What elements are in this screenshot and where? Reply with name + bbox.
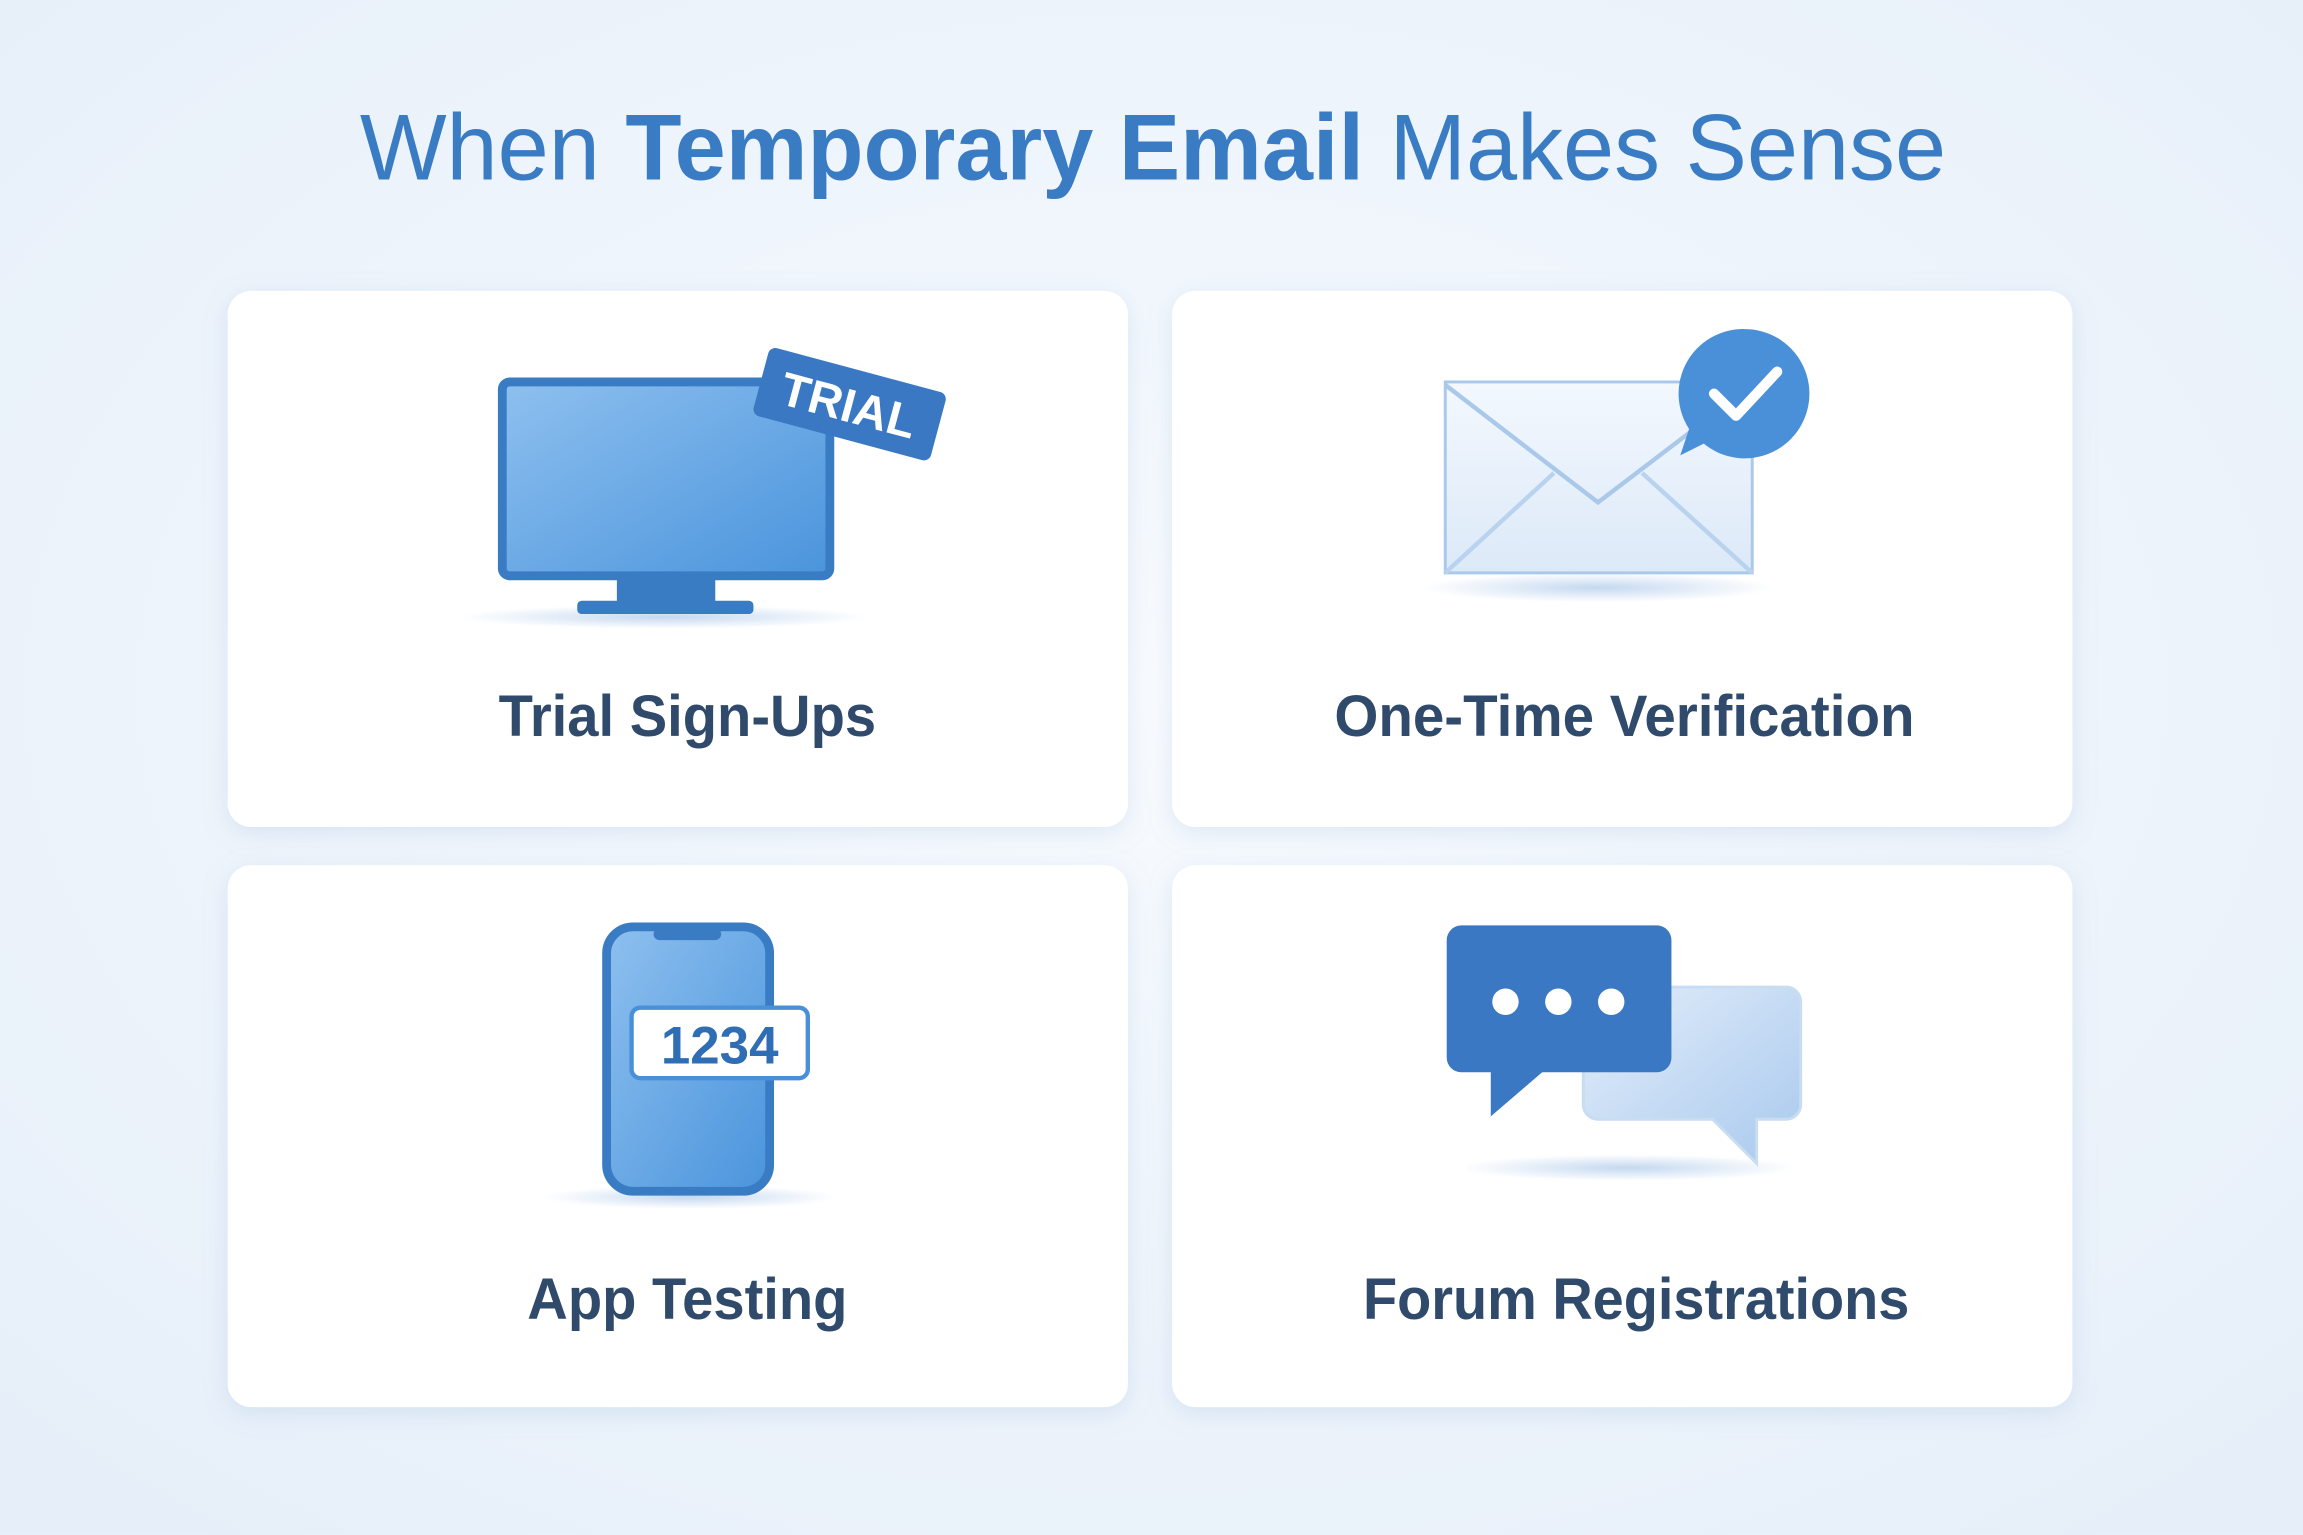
panel: forum registrations xyxy=(1172,865,2072,1407)
panel: one-time verification xyxy=(1172,291,2072,827)
icon: envelope with check xyxy=(1422,329,1809,602)
label: app testing: App Testing xyxy=(527,1267,847,1332)
icon: phone with code: 1234 xyxy=(661,1016,779,1075)
title: When Temporary Email Makes Sense xyxy=(360,94,1946,199)
icon: monitor: TRIAL xyxy=(775,362,922,449)
icon: chat bubbles xyxy=(1447,925,1801,1181)
label: forum registrations: Forum Registrations xyxy=(1363,1267,1909,1332)
panel: app testing xyxy=(228,865,1128,1407)
label: trial sign-ups: Trial Sign-Ups xyxy=(499,684,876,749)
label: one-time verification: One-Time Verification xyxy=(1334,684,1915,749)
icon: phone with code xyxy=(543,927,837,1209)
panel: trial sign-ups xyxy=(228,291,1128,827)
icon: monitor xyxy=(458,346,947,629)
